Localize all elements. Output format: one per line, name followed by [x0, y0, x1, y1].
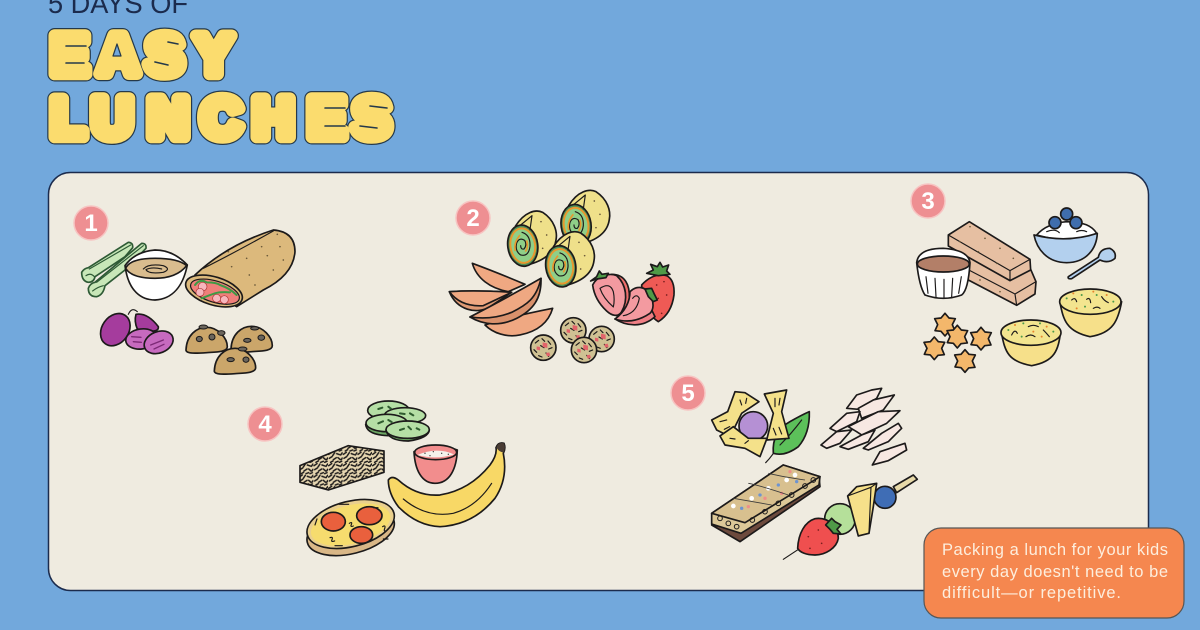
pasta salad — [712, 390, 809, 463]
callout: difficult—or repetitive. — [942, 584, 1121, 602]
granola bar with sprinkles — [712, 465, 820, 542]
banana — [388, 443, 505, 527]
dip cup — [414, 445, 457, 483]
badge 1 — [74, 206, 108, 240]
badge 1: 1 — [84, 210, 98, 237]
spoon — [1068, 248, 1115, 279]
badge 3: 3 — [921, 188, 935, 215]
title: LUNCHES — [51, 86, 390, 149]
burrito — [182, 230, 295, 313]
title — [48, 0, 390, 149]
badge 2: 2 — [466, 205, 480, 232]
celery — [82, 242, 146, 297]
cucumber slices — [366, 401, 429, 441]
callout — [924, 528, 1184, 618]
cheese stars — [924, 313, 991, 372]
plums — [94, 308, 177, 358]
foods for lunch 2 — [449, 190, 674, 363]
foods for lunch 3 — [917, 208, 1122, 372]
graham sticks — [948, 222, 1036, 305]
strawberries — [591, 262, 674, 325]
lunch 4 — [248, 401, 505, 564]
fruit skewer — [783, 475, 917, 559]
main panel — [48, 172, 1148, 590]
energy balls — [531, 318, 614, 363]
yogurt bowl with blueberries — [1034, 208, 1097, 263]
badge 2 — [456, 201, 490, 235]
shredded chicken — [821, 388, 907, 465]
lunch 5 — [671, 376, 917, 559]
lunch 3 — [911, 184, 1122, 372]
title: EASY — [51, 23, 232, 86]
badge 4: 4 — [258, 411, 272, 438]
pizza — [302, 491, 399, 564]
quiche cups — [1001, 289, 1122, 366]
ramekin of dip — [917, 248, 970, 298]
badge 4 — [248, 407, 282, 441]
callout: every day doesn't need to be — [942, 563, 1168, 581]
bowl of dip — [125, 250, 187, 300]
badge 5: 5 — [681, 380, 695, 407]
pinwheel rolls — [505, 190, 610, 289]
lunch 2 — [449, 190, 674, 363]
cookies — [186, 325, 272, 374]
badge 5 — [671, 376, 705, 410]
foods for lunch 5 — [712, 388, 917, 559]
foods for lunch 1 — [82, 230, 295, 374]
callout: Packing a lunch for your kids — [942, 541, 1168, 559]
foods for lunch 4 — [300, 401, 505, 564]
badge 3 — [911, 184, 945, 218]
title: LUNCHES — [51, 86, 390, 149]
title: EASY — [51, 23, 232, 86]
sweet potato wedges — [449, 263, 553, 336]
lunch 1 — [74, 206, 295, 374]
granola bar — [300, 446, 384, 490]
